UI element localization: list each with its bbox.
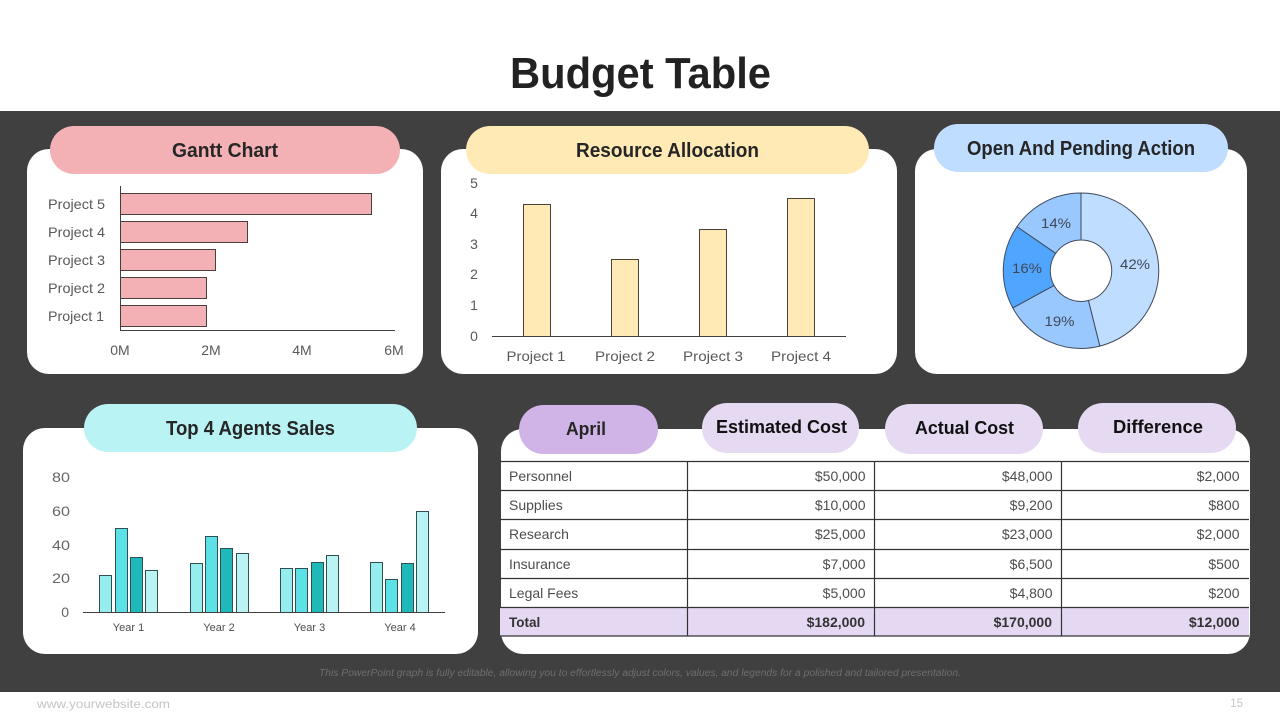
donut chart: 14% <box>1041 215 1071 231</box>
panel: gantt chart <box>27 126 423 374</box>
total row background <box>500 607 1249 636</box>
grouped column chart: Year 2 <box>203 622 235 634</box>
column header: Difference: Difference <box>1113 417 1203 437</box>
page number: 15 <box>1230 698 1243 710</box>
grouped column chart: Year 4 <box>384 622 416 634</box>
horizontal bar chart: 0M <box>110 342 130 358</box>
data table: $6,500 <box>1010 556 1053 572</box>
column chart: Project 4 <box>771 348 831 364</box>
total row: $12,000 <box>1189 614 1240 630</box>
column header: April: April <box>566 419 606 439</box>
panel: open and pending action <box>915 124 1247 374</box>
horizontal bar chart: Project 4 <box>48 224 105 240</box>
data table: $25,000 <box>815 526 866 542</box>
heading pill: Top 4 Agents Sales <box>166 418 335 440</box>
horizontal bar chart: 2M <box>201 342 221 358</box>
data table: $2,000 <box>1197 526 1240 542</box>
column chart <box>470 175 846 364</box>
data table: $4,800 <box>1010 585 1053 601</box>
horizontal bar chart <box>48 186 404 358</box>
heading pill <box>84 404 417 452</box>
heading pill: Gantt Chart <box>172 140 278 162</box>
grouped column chart: 20 <box>52 570 70 586</box>
total row <box>509 614 1240 630</box>
grouped column chart: 80 <box>52 469 70 485</box>
horizontal bar chart: Project 5 <box>48 196 105 212</box>
donut chart: 42% <box>1120 256 1150 272</box>
data table: Personnel <box>509 468 572 484</box>
grouped column chart: Year 1 <box>113 622 144 634</box>
card <box>441 149 897 374</box>
data table: $500 <box>1208 556 1240 572</box>
horizontal bar chart: Project 3 <box>48 252 105 268</box>
data table: Insurance <box>509 556 571 572</box>
column header: Estimated Cost: Estimated Cost <box>716 417 847 437</box>
card <box>23 428 478 654</box>
title: Budget Table <box>510 49 771 98</box>
horizontal bar chart: 4M <box>292 342 312 358</box>
horizontal bar chart: 6M <box>384 342 404 358</box>
donut chart: 19% <box>1044 313 1074 329</box>
panel: budget table <box>500 403 1250 654</box>
horizontal bar chart: Project 1 <box>48 308 104 324</box>
column header: Actual Cost: Actual Cost <box>915 418 1014 438</box>
data table: $2,000 <box>1197 468 1240 484</box>
data table: $800 <box>1208 497 1240 513</box>
horizontal bar chart: Project 2 <box>48 280 105 296</box>
heading pill: Resource Allocation <box>576 140 759 162</box>
column header: April <box>519 405 658 454</box>
grouped column chart: 0 <box>61 604 69 620</box>
donut chart <box>1003 193 1159 348</box>
column chart: Project 1 <box>506 348 566 364</box>
card <box>27 149 423 374</box>
column chart: 0 <box>470 328 478 344</box>
data table: Supplies <box>509 497 563 513</box>
grouped column chart: 60 <box>52 503 70 519</box>
data table: $50,000 <box>815 468 866 484</box>
data table: Research <box>509 526 569 542</box>
panel: resource allocation <box>441 126 897 374</box>
panel: top 4 agents sales <box>23 404 478 654</box>
heading pill <box>934 124 1228 172</box>
card <box>501 429 1250 654</box>
data table: $10,000 <box>815 497 866 513</box>
data table: $9,200 <box>1010 497 1053 513</box>
column chart: Project 3 <box>683 348 743 364</box>
data table <box>500 461 1249 636</box>
data table: $23,000 <box>1002 526 1053 542</box>
column chart: 1 <box>470 297 478 313</box>
column chart: 3 <box>470 236 478 252</box>
column chart: 4 <box>470 205 478 221</box>
heading pill <box>50 126 400 174</box>
grouped column chart: 40 <box>52 537 70 553</box>
data table: Legal Fees <box>509 585 578 601</box>
heading pill: Open And Pending Action <box>967 138 1195 160</box>
data table: $200 <box>1208 585 1240 601</box>
data table: $48,000 <box>1002 468 1053 484</box>
card <box>915 149 1247 374</box>
total row: $182,000 <box>807 614 865 630</box>
column chart: 2 <box>470 266 478 282</box>
total row: Total <box>509 615 540 630</box>
grouped column chart: Year 3 <box>294 622 325 634</box>
donut chart: 16% <box>1012 260 1042 276</box>
data table: $7,000 <box>823 556 866 572</box>
column header: Difference <box>1078 403 1236 453</box>
column chart: Project 2 <box>595 348 655 364</box>
column chart: 5 <box>470 175 478 191</box>
grouped column chart <box>52 469 445 634</box>
total row: $170,000 <box>994 614 1052 630</box>
footnote: This PowerPoint graph is fully editable, allowing you to effortlessly adjust colors, values, and legends for a polished and tailored presentation. <box>319 668 961 679</box>
heading pill <box>466 126 869 174</box>
column header: Actual Cost <box>885 404 1043 454</box>
column header: Estimated Cost <box>702 403 859 453</box>
footer website: www.yourwebsite.com <box>36 699 170 711</box>
data table: $5,000 <box>823 585 866 601</box>
